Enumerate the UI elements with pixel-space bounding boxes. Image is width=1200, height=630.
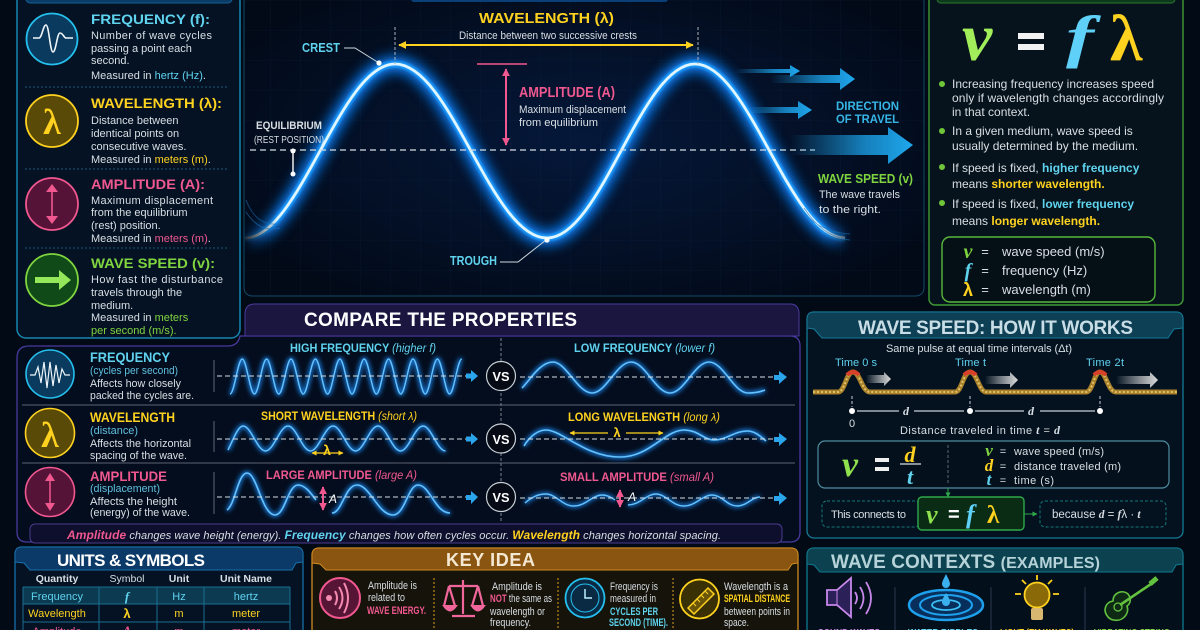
idea: not the same: Amplitude is xyxy=(492,581,542,593)
units table xyxy=(23,573,290,630)
definition: frequency: second. xyxy=(91,55,130,67)
text: frequency: (cycles per second) xyxy=(90,365,178,377)
legend box: λ xyxy=(963,280,973,300)
amplitude marker: AMPLITUDE (A) xyxy=(519,85,615,101)
legend box: = xyxy=(981,244,989,259)
badge: vs: VS xyxy=(492,490,510,505)
definition: amplitude: from the equilibrium xyxy=(91,207,188,219)
text: frequency: packed the cycles are. xyxy=(90,390,194,402)
chart: long wavelength: λ xyxy=(613,425,621,440)
definition: amplitude: AMPLITUDE (A): xyxy=(91,176,205,192)
panel: wave contexts xyxy=(807,548,1183,630)
idea: not the same: frequency. xyxy=(490,617,531,629)
big equation: f xyxy=(1066,4,1102,69)
chart: large amplitude xyxy=(217,470,478,515)
text: amplitude: (displacement) xyxy=(90,483,160,495)
speed formula box: = xyxy=(1000,475,1006,487)
definition: amplitude: Maximum displacement xyxy=(91,195,213,207)
units table: meter xyxy=(232,608,260,620)
idea: spatial distance: between points in xyxy=(724,606,790,618)
direction label: DIRECTION xyxy=(836,99,899,113)
chart: small amplitude xyxy=(520,472,787,507)
idea: cycles per second: measured in xyxy=(610,593,656,605)
bullet list: in that context. xyxy=(952,105,1030,119)
definition: wave speed: WAVE SPEED (v): xyxy=(91,255,215,271)
definition: frequency: Number of wave cycles xyxy=(91,30,212,42)
icon: wave speed xyxy=(26,254,78,306)
speed formula box: v xyxy=(985,441,993,460)
badge: vs: VS xyxy=(492,369,510,384)
chart: short wavelength: λ xyxy=(323,442,331,458)
units table: Wavelength xyxy=(28,608,86,620)
text: amplitude: (energy) of the wave. xyxy=(90,507,190,519)
pulse rope diagram: d xyxy=(1028,404,1035,418)
definition: wavelength: identical points on xyxy=(91,128,179,140)
icon: guitar xyxy=(1094,578,1170,630)
idea: spatial distance: Wavelength is a xyxy=(724,581,789,593)
amplitude marker: Maximum displacement xyxy=(519,104,626,116)
text: frequency xyxy=(90,349,194,402)
pulse rope diagram: Distance traveled in time t = d xyxy=(900,423,1061,437)
panel: compare the properties xyxy=(17,304,800,543)
chart: large amplitude: LARGE AMPLITUDE (large A) xyxy=(266,470,417,482)
wave end strands xyxy=(246,200,850,240)
idea: cycles per second: SECOND (TIME). xyxy=(609,617,668,629)
amplitude marker: from equilibrium xyxy=(519,117,598,129)
text: frequency: Affects how closely xyxy=(90,378,181,390)
units table: Unit Name xyxy=(220,573,272,585)
units table: Quantity xyxy=(36,573,78,585)
pulse rope diagram: Same pulse at equal time intervals (Δt) xyxy=(886,343,1072,355)
text: wavelength: Affects the horizontal xyxy=(90,438,191,450)
crest label: CREST xyxy=(302,41,340,55)
definition: wave speed xyxy=(91,255,223,337)
idea: cycles per second: Frequency is xyxy=(610,581,658,593)
contexts heading xyxy=(807,548,1183,573)
units table: m xyxy=(174,608,184,620)
definition: frequency: FREQUENCY (f): xyxy=(91,11,210,27)
equilibrium line xyxy=(250,149,815,151)
text: amplitude: Affects the height xyxy=(90,496,177,508)
row: amplitude xyxy=(26,468,787,519)
compare heading: COMPARE THE PROPERTIES xyxy=(304,310,577,331)
text: frequency: FREQUENCY xyxy=(90,349,171,365)
units table: Unit xyxy=(169,573,190,585)
units table: f xyxy=(125,589,131,604)
badge: vs xyxy=(486,424,516,453)
chart: small amplitude: SMALL AMPLITUDE (small A) xyxy=(560,472,714,484)
icon: amplitude xyxy=(26,178,78,230)
equilibrium label xyxy=(254,120,324,176)
connection row: = xyxy=(948,504,960,526)
wavelength marker xyxy=(395,10,698,64)
idea: energy: WAVE ENERGY. xyxy=(367,605,426,617)
text: wavelength: WAVELENGTH xyxy=(90,409,175,425)
definition: wave speed: per second (m/s). xyxy=(91,325,177,337)
idea: energy xyxy=(320,578,426,618)
panel: definitions xyxy=(17,0,240,338)
icon: frequency xyxy=(26,14,78,64)
speed formula box: t xyxy=(907,464,914,489)
wave speed label: to the right. xyxy=(819,204,881,216)
speed formula box: d xyxy=(904,442,916,467)
idea: energy: Amplitude is xyxy=(368,580,417,592)
badge: vs: VS xyxy=(492,432,510,447)
icon: lambda: λ xyxy=(41,415,59,455)
row: frequency xyxy=(26,343,787,402)
connection row: λ xyxy=(987,502,1000,529)
idea: spatial distance: space. xyxy=(724,617,749,629)
chart: large amplitude: A xyxy=(328,492,337,506)
direction arrows xyxy=(735,65,913,164)
definition: frequency: passing a point each xyxy=(91,43,192,55)
definition: amplitude: (rest) position. xyxy=(91,220,161,232)
trough label: TROUGH xyxy=(450,254,497,268)
panel: units and symbols xyxy=(15,547,303,630)
text: amplitude xyxy=(90,468,190,519)
legend box: f xyxy=(965,260,974,282)
icon: lambda xyxy=(26,408,74,458)
units heading: UNITS & SYMBOLS xyxy=(57,551,205,570)
row: wavelength xyxy=(26,408,787,462)
definition: wavelength: WAVELENGTH (λ): xyxy=(91,95,222,111)
legend box: frequency (Hz) xyxy=(1002,263,1087,278)
speed formula box: distance traveled (m) xyxy=(1014,461,1121,473)
icon: sound waves xyxy=(818,578,880,630)
wavelength marker: WAVELENGTH (λ) xyxy=(479,10,614,27)
bullet list: Increasing frequency increases speed xyxy=(952,77,1154,91)
chart: short wavelength xyxy=(217,411,478,458)
legend box: v xyxy=(964,241,974,263)
definition: wavelength: consecutive waves. xyxy=(91,141,186,153)
contexts heading: WAVE CONTEXTS (EXAMPLES) xyxy=(831,552,1100,573)
units table: hertz xyxy=(234,591,258,603)
text: wavelength: (distance) xyxy=(90,425,138,437)
big equation: v xyxy=(962,0,993,75)
connection row: because d = fλ · t xyxy=(1052,509,1141,521)
chart: short wavelength: SHORT WAVELENGTH (short λ) xyxy=(261,411,417,423)
trough label xyxy=(450,237,550,268)
pulse rope diagram: Time 0 s xyxy=(835,357,878,369)
legend box xyxy=(942,237,1155,302)
speed formula box xyxy=(818,441,1169,489)
panel: wave speed xyxy=(807,312,1183,538)
direction label: OF TRAVEL xyxy=(836,112,899,126)
speed formula box: d xyxy=(985,456,994,475)
wave speed label: The wave travels xyxy=(819,189,900,201)
chart: low frequency xyxy=(520,343,787,393)
connection row: f xyxy=(966,500,977,529)
units table: Frequency xyxy=(31,591,83,603)
icon: water ripples xyxy=(908,574,983,630)
bullet list: If speed is fixed, higher frequency xyxy=(952,161,1140,175)
chart: small amplitude: A xyxy=(627,490,636,504)
panel: wave diagram xyxy=(244,0,924,296)
direction label xyxy=(836,99,899,126)
pulse rope diagram: d xyxy=(903,404,910,418)
connection row: This connects to xyxy=(831,509,906,521)
main sine wave xyxy=(245,64,845,238)
legend box: = xyxy=(981,263,989,278)
units table: Symbol xyxy=(109,573,145,585)
panel: formula xyxy=(929,0,1183,305)
definition: frequency: Measured in hertz (Hz). xyxy=(91,70,206,82)
pulse rope diagram: Time 2t xyxy=(1086,357,1124,369)
text: wavelength xyxy=(90,409,191,462)
amplitude marker xyxy=(477,64,626,145)
badge: vs xyxy=(486,362,516,390)
wave speed label xyxy=(818,171,913,216)
definition: wave speed: medium. xyxy=(91,300,133,312)
icon: wavelength: λ xyxy=(43,102,61,142)
connection row xyxy=(822,488,1166,530)
crest label xyxy=(302,41,382,66)
chart: long wavelength: LONG WAVELENGTH (long λ) xyxy=(568,412,720,424)
speed formula box: time (s) xyxy=(1014,475,1054,487)
wave speed heading: WAVE SPEED: HOW IT WORKS xyxy=(858,318,1133,339)
units table: Hz xyxy=(172,591,186,603)
chart: low frequency: LOW FREQUENCY (lower f) xyxy=(574,343,715,355)
speed formula box: v xyxy=(842,444,859,484)
speed formula box: t xyxy=(987,470,993,489)
definition: wave speed: Measured in meters xyxy=(91,312,189,324)
bullet list: means shorter wavelength. xyxy=(952,177,1105,191)
icon: frequency waveform xyxy=(26,350,74,398)
definition: wave speed: travels through the xyxy=(91,287,182,299)
big equation: λ xyxy=(1110,2,1143,75)
idea: cycles per second xyxy=(566,578,668,629)
legend box: wavelength (m) xyxy=(1001,282,1091,297)
speed formula box: = xyxy=(1000,446,1006,458)
definition: wavelength xyxy=(91,95,222,166)
key idea heading xyxy=(312,548,798,570)
text: amplitude: AMPLITUDE xyxy=(90,468,167,484)
units table: λ xyxy=(123,606,131,621)
idea: spatial distance: SPATIAL DISTANCE xyxy=(724,593,790,605)
idea: cycles per second: CYCLES PER xyxy=(610,606,658,618)
pulse rope diagram: Time t xyxy=(955,357,986,369)
big equation xyxy=(962,0,1143,75)
summary strip xyxy=(30,524,782,543)
bullet list: usually determined by the medium. xyxy=(952,139,1138,153)
legend box: wave speed (m/s) xyxy=(1001,244,1105,259)
text: wavelength: spacing of the wave. xyxy=(90,450,187,462)
idea: not the same: wavelength or xyxy=(489,606,545,618)
wave speed heading xyxy=(807,312,1183,339)
chart: high frequency xyxy=(217,343,478,394)
pulse rope diagram: 0 xyxy=(849,418,855,430)
chart: high frequency: HIGH FREQUENCY (higher f) xyxy=(290,343,436,355)
compare heading xyxy=(245,304,799,336)
bullet list: means longer wavelength. xyxy=(952,214,1100,228)
panel: key idea xyxy=(312,548,798,630)
wave speed label: WAVE SPEED (v) xyxy=(818,171,913,186)
wavelength marker: Distance between two successive crests xyxy=(459,30,637,42)
icon: light bulb xyxy=(1000,575,1074,630)
pulse rope diagram xyxy=(813,343,1177,437)
idea: not the same xyxy=(444,580,552,629)
bullet list: In a given medium, wave speed is xyxy=(952,124,1133,138)
speed formula box: = xyxy=(1000,461,1006,473)
icon: double arrow xyxy=(26,468,74,516)
definition: amplitude xyxy=(91,176,213,245)
bullet list: If speed is fixed, lower frequency xyxy=(952,197,1134,211)
bullet list xyxy=(939,77,1164,228)
chart: long wavelength xyxy=(520,412,787,457)
units heading xyxy=(15,547,303,570)
idea: spatial distance xyxy=(680,580,790,629)
definition: wave speed: How fast the disturbance xyxy=(91,274,223,286)
legend box: = xyxy=(981,282,989,297)
definition: amplitude: Measured in meters (m). xyxy=(91,233,211,245)
definition: wavelength: Distance between xyxy=(91,115,178,127)
definition: wavelength: Measured in meters (m). xyxy=(91,154,211,166)
icon: wavelength xyxy=(26,95,78,147)
speed formula box: wave speed (m/s) xyxy=(1013,446,1104,458)
summary strip: Amplitude changes wave height (energy). Frequency changes how often cycles occur. Wavelength changes horizontal spacing. xyxy=(66,528,721,542)
key idea heading: KEY IDEA xyxy=(446,550,535,570)
bullet list: only if wavelength changes accordingly xyxy=(952,91,1164,105)
equilibrium label: EQUILIBRIUM xyxy=(256,120,322,132)
definition: frequency xyxy=(91,11,212,82)
equilibrium label: (REST POSITION) xyxy=(254,134,324,146)
badge: vs xyxy=(486,482,516,512)
connection row: v xyxy=(926,500,938,529)
idea: not the same: NOT the same as xyxy=(490,593,552,605)
idea: energy: related to xyxy=(368,592,405,604)
